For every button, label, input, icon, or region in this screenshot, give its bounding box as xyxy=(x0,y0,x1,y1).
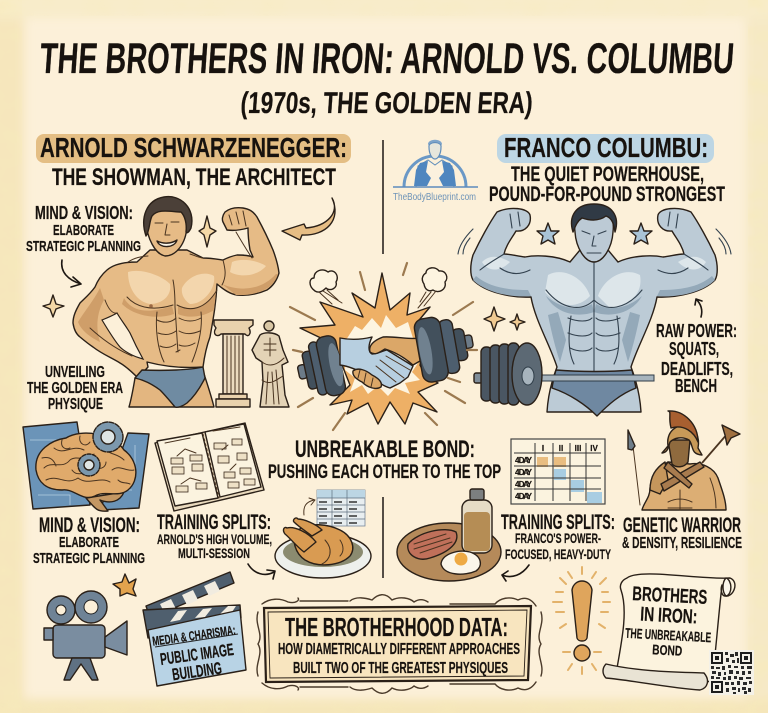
chart: four-day split table: 4 DAY xyxy=(515,492,533,501)
text: Franco training splits: FOCUSED, HEAVY-DUTY xyxy=(505,546,611,562)
icon: left dumbbell end xyxy=(292,334,348,402)
heading: Arnold: ARNOLD SCHWARZENEGGER: xyxy=(40,132,347,163)
scroll: brothers in iron: BROTHERS xyxy=(632,583,708,609)
arrow: to Arnold shoulder xyxy=(62,260,81,287)
logo: The Body Blueprint xyxy=(393,140,478,203)
icon: sparkle left xyxy=(43,295,64,317)
banner: brotherhood data xyxy=(257,595,542,693)
text: lower mind and vision: ELABORATE xyxy=(59,534,119,551)
icon: sparkle right of Arnold head xyxy=(199,216,216,247)
title xyxy=(38,35,736,120)
heading: unbreakable bond xyxy=(268,436,501,483)
icon: steak, egg and bottle on board xyxy=(397,489,501,581)
chart: four-day split table: IV xyxy=(590,444,598,453)
scroll: brothers in iron: BOND xyxy=(652,641,683,659)
text: lower mind and vision: MIND & VISION: xyxy=(39,514,140,537)
text: Franco training splits: FRANCO'S POWER- xyxy=(515,530,601,546)
icon: steam cloud right xyxy=(418,268,447,308)
scroll: brothers in iron: IN IRON: xyxy=(640,604,698,629)
label: unveiling: PHYSIQUE xyxy=(48,396,103,413)
chart: four-day split table: 4 DAY xyxy=(515,468,533,477)
label: Arnold mind and vision: MIND & VISION: xyxy=(35,203,133,223)
label: raw power: SQUATS, xyxy=(669,339,719,359)
label: unveiling xyxy=(27,364,123,413)
label: Arnold mind and vision xyxy=(26,203,141,255)
icon: classical statue xyxy=(252,321,289,407)
icon: barbell xyxy=(474,343,654,405)
chart: four-day split table: II xyxy=(559,444,563,453)
icon: star by camera xyxy=(113,574,136,596)
figure: Franco xyxy=(471,204,717,416)
icon: exclamation mark xyxy=(553,567,610,674)
banner: brotherhood data: THE BROTHERHOOD DATA: xyxy=(285,612,508,642)
label: raw power: DEADLIFTS, xyxy=(661,359,733,379)
arrow: splits to food xyxy=(502,565,529,581)
logo: The Body Blueprint: TheBodyBlueprint.com xyxy=(393,192,476,203)
text: Arnold training splits: MULTI-SESSION xyxy=(178,545,250,561)
icon: clapperboard: BUILDING xyxy=(171,659,223,684)
chart: four-day split table: III xyxy=(575,444,581,453)
label: Arnold mind and vision: ELABORATE xyxy=(53,222,114,239)
label: raw power xyxy=(656,321,737,396)
arrow: splits to chicken xyxy=(248,564,275,579)
text: lower mind and vision xyxy=(33,514,145,567)
text: lower mind and vision: STRATEGIC PLANNING xyxy=(33,550,145,567)
chart: four-day split table: 4 DAY xyxy=(515,456,533,465)
scroll: brothers in iron xyxy=(603,574,735,690)
icon: handshake xyxy=(340,337,427,388)
text: genetic warrior xyxy=(622,514,742,552)
icon: right dumbbell end xyxy=(413,311,478,383)
heading: Arnold: THE SHOWMAN, THE ARCHITECT xyxy=(52,164,336,191)
icon: training notebook xyxy=(155,423,264,511)
icon: clapperboard xyxy=(143,572,246,686)
arrow: curved tan xyxy=(282,198,335,240)
center divider top xyxy=(382,140,384,254)
label: raw power: BENCH xyxy=(675,376,717,396)
scroll: brothers in iron: THE UNBREAKABLE xyxy=(625,625,712,645)
icon: macro table xyxy=(317,490,365,526)
figure: Arnold xyxy=(73,197,279,407)
chart: four-day split table xyxy=(511,439,605,504)
chart: four-day split table: I xyxy=(542,444,544,453)
chart: four-day split table: 4 DAY xyxy=(515,480,533,489)
QR code xyxy=(709,650,754,695)
icon: sparkles by barbell xyxy=(484,307,525,331)
label: unveiling: UNVEILING xyxy=(45,364,105,381)
icon: classical column xyxy=(214,320,253,407)
arrow: table from chicken xyxy=(304,498,315,515)
heading: unbreakable bond: PUSHING EACH OTHER TO THE TOP xyxy=(268,462,501,483)
title: (1970s, THE GOLDEN ERA) xyxy=(240,87,534,120)
icons: stars by Franco head xyxy=(537,223,652,244)
icon: roast chicken on plate xyxy=(275,518,371,578)
heading: Arnold xyxy=(36,132,351,191)
text: Franco training splits xyxy=(501,511,615,562)
icon: film camera xyxy=(44,591,127,680)
text: Arnold training splits: TRAINING SPLITS: xyxy=(157,511,271,534)
label: unveiling: THE GOLDEN ERA xyxy=(27,380,123,397)
icon: genetic warrior xyxy=(628,411,740,510)
text: Franco training splits: TRAINING SPLITS: xyxy=(501,511,615,534)
arrow: raw power to arm xyxy=(695,299,702,317)
banner: brotherhood data: BUILT TWO OF THE GREATEST PHYSIQUES xyxy=(293,660,508,677)
heading: unbreakable bond: UNBREAKABLE BOND: xyxy=(295,436,475,463)
text: Arnold training splits: ARNOLD'S HIGH VOLUME, xyxy=(157,531,272,547)
icon: brain on blueprint xyxy=(23,422,149,511)
text: Arnold training splits xyxy=(157,511,272,561)
impact lines xyxy=(290,263,477,430)
icon: clapperboard: MEDIA & CHARISMA: xyxy=(151,622,237,649)
icon: clapperboard: PUBLIC IMAGE xyxy=(159,640,235,669)
heading: Franco xyxy=(489,132,725,206)
burst behind handshake xyxy=(300,273,438,424)
center divider bottom xyxy=(382,497,384,578)
label: Arnold mind and vision: STRATEGIC PLANNING xyxy=(26,238,141,255)
icon: steam cloud left xyxy=(310,270,342,304)
motion lines by Franco arms xyxy=(458,229,731,254)
banner: brotherhood data: HOW DIAMETRICALLY DIFFERENT APPROACHES xyxy=(278,641,520,658)
